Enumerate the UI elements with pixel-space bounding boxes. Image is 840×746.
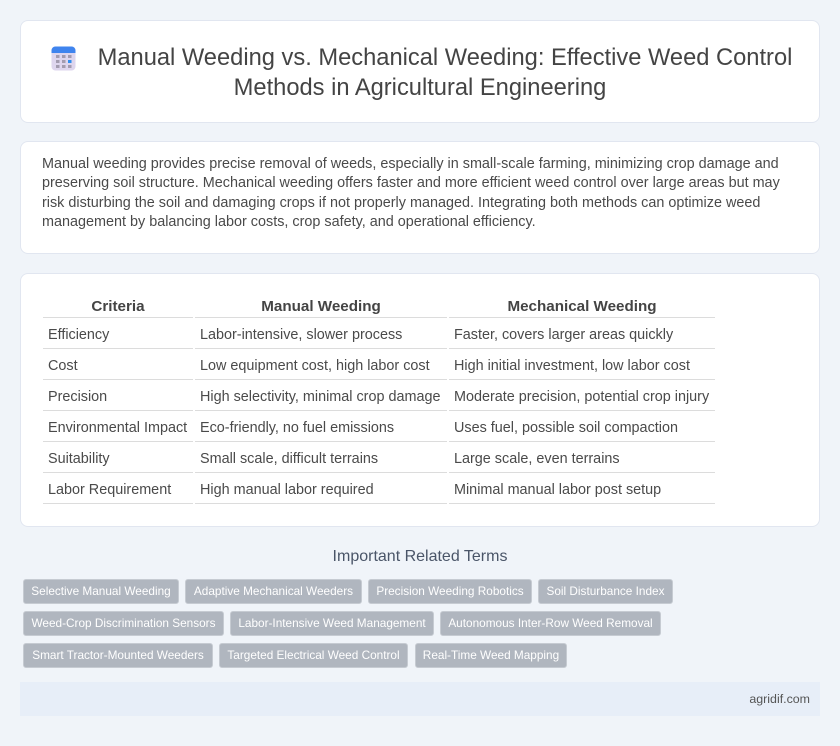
table row: efficiency <box>43 327 715 349</box>
tag <box>440 611 661 636</box>
panel: comparison table <box>20 273 820 527</box>
text block: summary: management by balancing labor costs, crop safety, and operational efficiency. <box>42 214 536 230</box>
tag group: related terms <box>23 579 673 668</box>
tag <box>415 643 567 668</box>
table row: suitability <box>43 451 715 473</box>
text block: summary <box>42 156 780 230</box>
tag: Autonomous Inter-Row Weed Removal <box>448 616 653 630</box>
table row: environmental impact: Eco-friendly, no fuel emissions <box>200 420 394 436</box>
footer source: agridif.com <box>749 692 810 706</box>
tag: Soil Disturbance Index <box>546 584 665 598</box>
title: Manual Weeding vs. Mechanical Weeding: Effective Weed Control <box>98 45 792 71</box>
tag: Real-Time Weed Mapping <box>423 648 559 662</box>
table row: cost: High initial investment, low labor cost <box>454 358 690 374</box>
tag <box>368 579 532 604</box>
table row: precision: High selectivity, minimal crop damage <box>200 389 440 405</box>
tag: Weed-Crop Discrimination Sensors <box>31 616 216 630</box>
table row: environmental impact: Environmental Impact <box>48 420 187 436</box>
table row: labor requirement: High manual labor required <box>200 482 374 498</box>
table row: precision <box>43 389 715 411</box>
table row: efficiency: Labor-intensive, slower process <box>200 327 402 343</box>
table row: suitability: Large scale, even terrains <box>454 451 620 467</box>
table row: labor requirement: Minimal manual labor post setup <box>454 482 661 498</box>
heading: related terms: Important Related Terms <box>333 548 507 565</box>
tag <box>23 643 213 668</box>
table row: cost: Low equipment cost, high labor cost <box>200 358 430 374</box>
table row: labor requirement <box>43 482 715 504</box>
table header: Manual Weeding <box>261 298 381 315</box>
text block: summary: Manual weeding provides precise removal of weeds, especially in small-scale farming, minimizing crop damage and <box>42 156 779 172</box>
tag <box>23 579 179 604</box>
table row: precision: Precision <box>48 389 107 405</box>
table row: suitability: Suitability <box>48 451 110 467</box>
tag: Adaptive Mechanical Weeders <box>194 584 353 598</box>
table header: Criteria <box>91 298 145 315</box>
table row: cost <box>43 358 715 380</box>
tag <box>23 611 224 636</box>
table row: efficiency: Efficiency <box>48 327 109 343</box>
table row: cost: Cost <box>48 358 78 374</box>
table row: labor requirement: Labor Requirement <box>48 482 171 498</box>
table row: suitability: Small scale, difficult terrains <box>200 451 378 467</box>
title <box>98 45 792 101</box>
table header: Mechanical Weeding <box>507 298 657 315</box>
tag: Precision Weeding Robotics <box>376 584 524 598</box>
icon: calendar <box>52 46 76 70</box>
panel: title header <box>20 20 820 123</box>
title: Methods in Agricultural Engineering <box>234 75 606 101</box>
table row: environmental impact <box>43 420 715 442</box>
table row: efficiency: Faster, covers larger areas quickly <box>454 327 673 343</box>
tag <box>219 643 408 668</box>
panel: summary paragraph <box>20 141 820 254</box>
footer bar <box>20 682 820 716</box>
tag: Smart Tractor-Mounted Weeders <box>32 648 204 662</box>
tag: Labor-Intensive Weed Management <box>238 616 426 630</box>
text block: summary: preserving soil structure. Mechanical weeding offers faster and more efficient weed control over large areas but may <box>42 175 780 191</box>
table row: precision: Moderate precision, potential crop injury <box>454 389 709 405</box>
tag: Selective Manual Weeding <box>31 584 171 598</box>
tag <box>185 579 362 604</box>
tag <box>538 579 673 604</box>
table header <box>43 298 715 318</box>
table row: environmental impact: Uses fuel, possible soil compaction <box>454 420 678 436</box>
text block: summary: risk disturbing the soil and damaging crops if not properly managed. Integrating both methods can optimize weed <box>42 195 760 211</box>
tag: Targeted Electrical Weed Control <box>227 648 400 662</box>
tag <box>230 611 434 636</box>
